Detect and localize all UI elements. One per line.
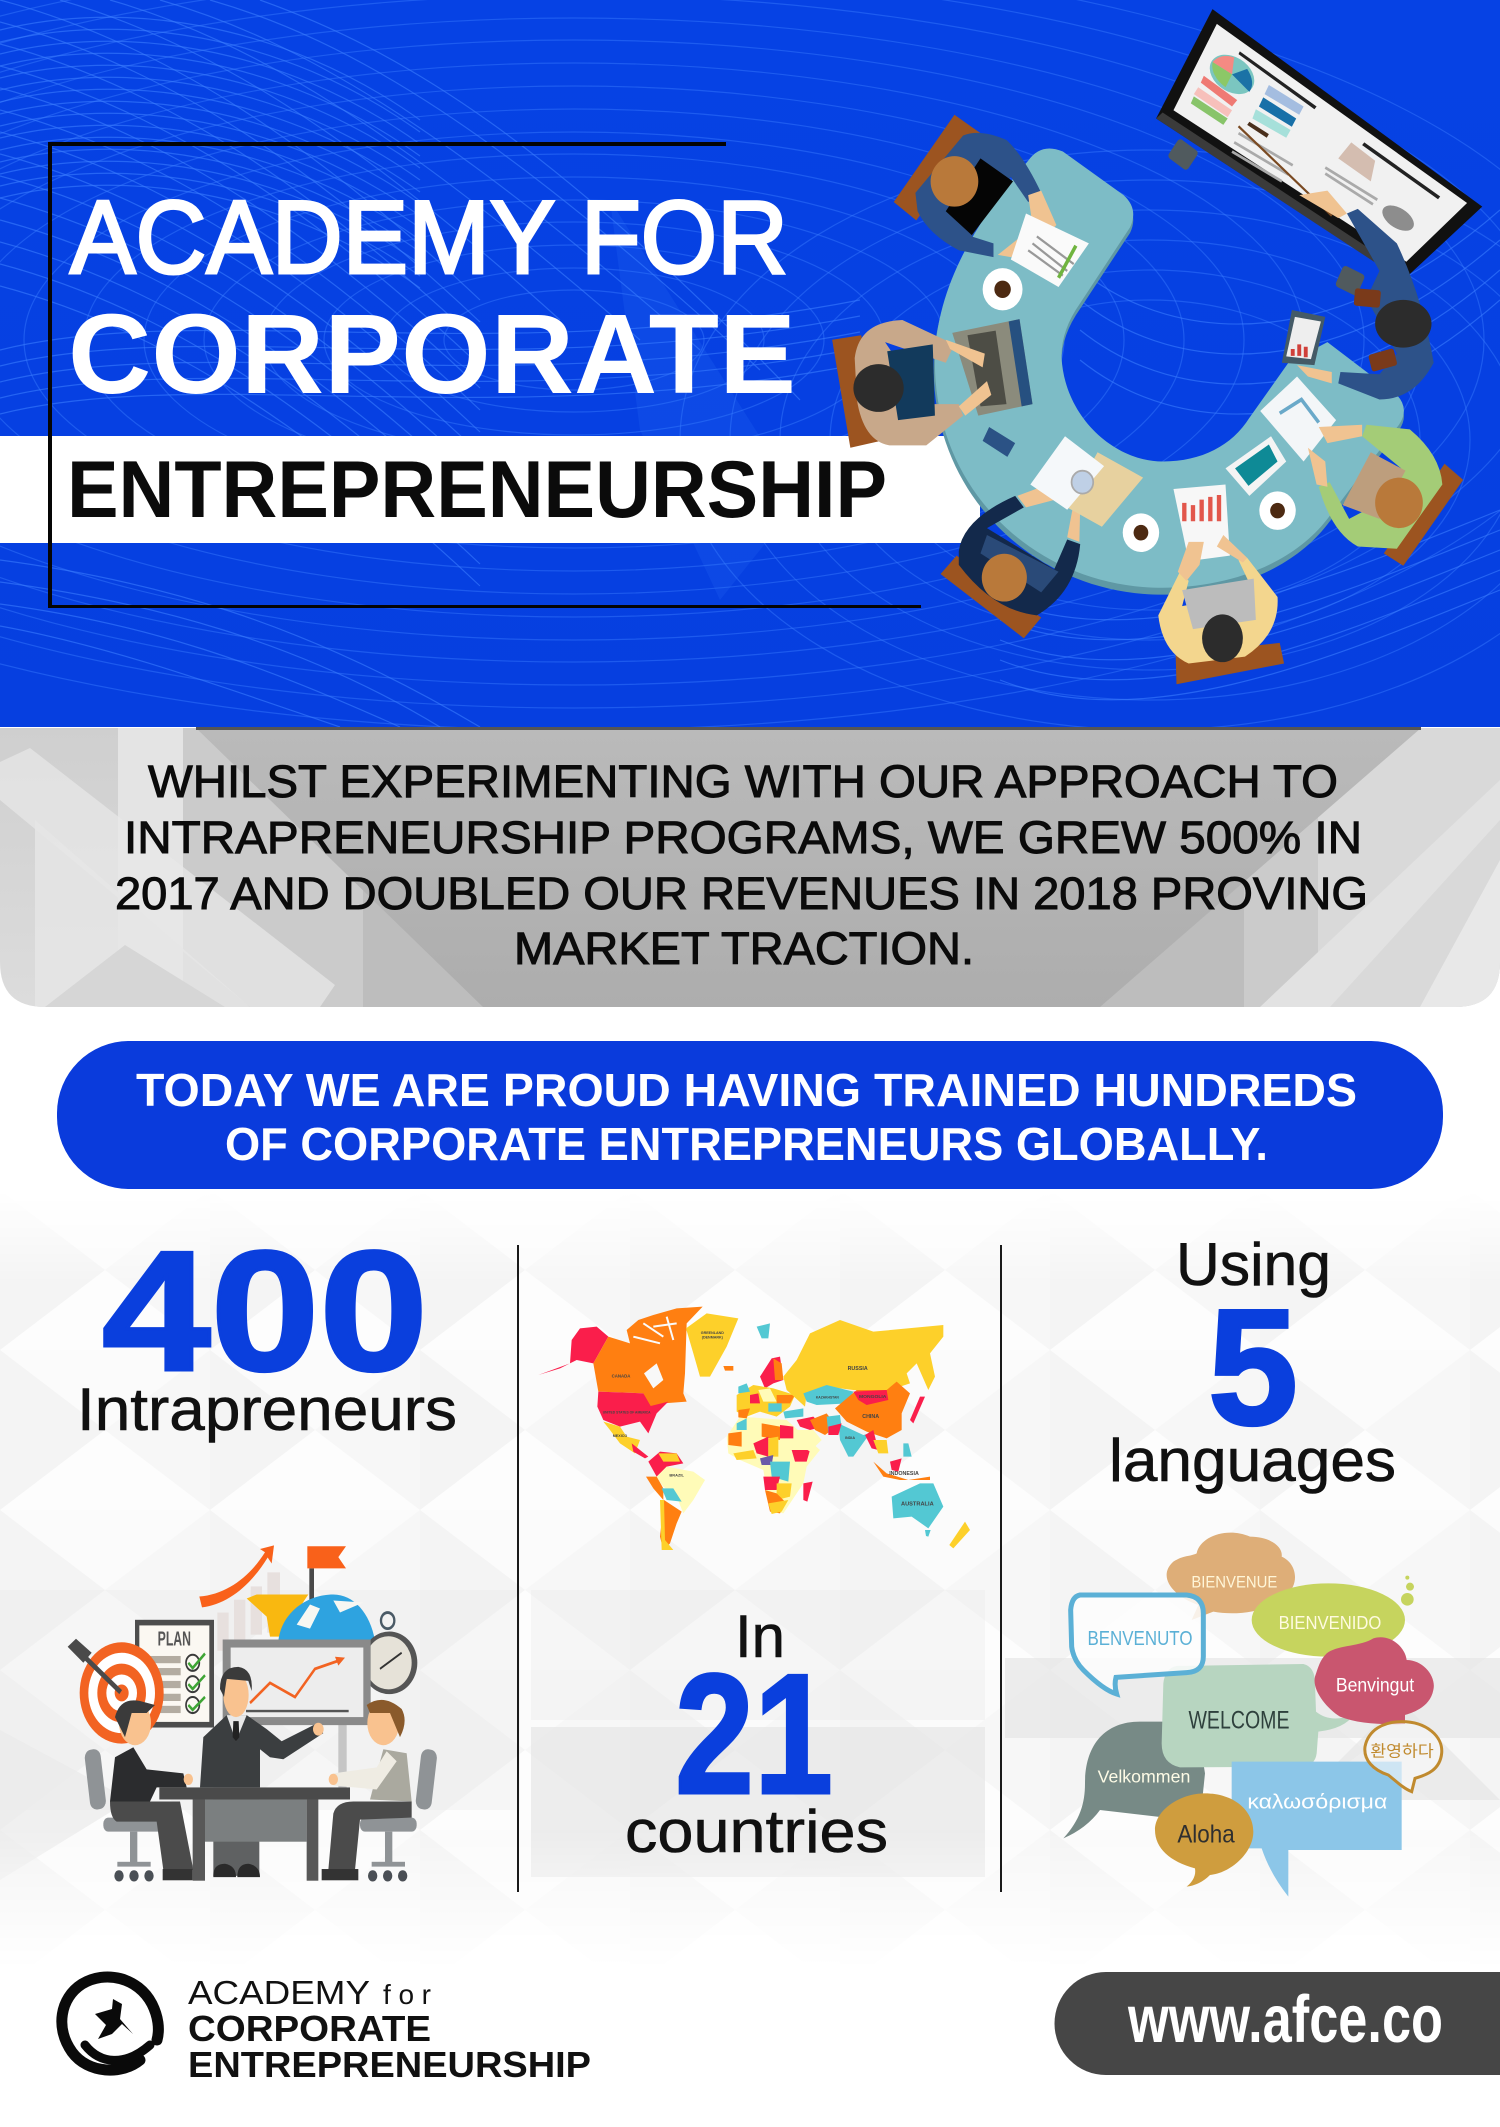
- logo wordmark: ACADEMY: [188, 1974, 370, 2011]
- north america: [538, 1307, 703, 1458]
- bubble: benvingut: Benvingut: [1336, 1675, 1415, 1696]
- flag: [307, 1546, 346, 1603]
- white title band: [0, 436, 980, 543]
- screen: [1156, 9, 1482, 296]
- number: 21: [675, 1639, 833, 1830]
- map labels: INDONESIA: [889, 1471, 919, 1477]
- logo wordmark: [188, 1974, 591, 2085]
- right seated man: [322, 1700, 438, 1881]
- map labels: INDIA: [845, 1436, 855, 1440]
- statement text: 2017 AND DOUBLED OUR REVENUES IN 2018 PROVING: [115, 868, 1368, 919]
- statement text: [115, 756, 1368, 974]
- bubble: korean: [1365, 1722, 1442, 1792]
- map labels: BRAZIL: [669, 1472, 685, 1477]
- person: bottom left: [941, 482, 1080, 638]
- cup: [983, 268, 1023, 310]
- stat: 5 languages: [1109, 1231, 1396, 1494]
- logo wordmark: for: [383, 1979, 431, 2010]
- svalbard and iceland: [757, 1323, 770, 1338]
- growth arrow: [199, 1545, 274, 1607]
- title: [67, 180, 887, 535]
- number: 400: [102, 1216, 428, 1407]
- phone: [983, 427, 1015, 457]
- speech bubbles: [1063, 1533, 1442, 1897]
- map labels: GREENLAND: [701, 1331, 724, 1335]
- bubble: velkommen: [1063, 1722, 1205, 1838]
- greenland: [686, 1313, 738, 1377]
- bars: [217, 1572, 280, 1651]
- illustration: meeting around table: [832, 9, 1482, 684]
- person: bottom: [1158, 535, 1284, 684]
- intro: Using: [1176, 1231, 1331, 1298]
- asia: [783, 1320, 943, 1480]
- funnel: [247, 1594, 308, 1637]
- presenter: [200, 1667, 324, 1877]
- map labels: MONGOLIA: [859, 1394, 887, 1400]
- stopwatch: [361, 1613, 417, 1694]
- left seated man: [84, 1700, 193, 1881]
- australia: [892, 1483, 970, 1548]
- map labels: KAZAKHSTAN: [816, 1396, 839, 1400]
- map labels: AUSTRALIA: [901, 1501, 934, 1507]
- bubble: benvenuto: [1071, 1595, 1203, 1694]
- statement text: INTRAPRENEURSHIP PROGRAMS, WE GREW 500% IN: [124, 812, 1362, 863]
- plan board: [135, 1620, 214, 1728]
- panel top edge: [196, 727, 1421, 730]
- callout text: [136, 1064, 1357, 1170]
- title line: academy for: ACADEMY FOR: [70, 180, 788, 296]
- bubble: greek: καλωσόρισμα: [1247, 1791, 1387, 1813]
- map labels: CANADA: [612, 1373, 631, 1378]
- bubble: aloha: [1155, 1793, 1253, 1887]
- bubble: bienvenue: [1167, 1533, 1295, 1620]
- faint triangle background for stats: [0, 1262, 1500, 1880]
- callout text: OF CORPORATE ENTREPRENEURS GLOBALLY.: [225, 1118, 1268, 1170]
- map labels: MEXICO: [613, 1434, 627, 1438]
- map labels: CHINA: [862, 1414, 879, 1420]
- grey statement panel: [0, 727, 1500, 1007]
- dividers: [517, 1245, 1002, 1892]
- bubble: bienvenido: BIENVENIDO: [1279, 1612, 1381, 1633]
- person: standing presenter: [1297, 191, 1434, 400]
- bubble: bienvenue: BIENVENUE: [1191, 1573, 1277, 1592]
- europe: [723, 1357, 795, 1418]
- world map: [538, 1307, 970, 1550]
- label: countries: [625, 1798, 888, 1865]
- plan board: PLAN: [158, 1627, 191, 1650]
- logo wordmark: CORPORATE: [188, 2008, 431, 2049]
- bubble: velkommen: Velkommen: [1098, 1767, 1190, 1787]
- map labels: UNITED STATES OF AMERICA: [603, 1411, 651, 1415]
- bubble: bienvenido: [1252, 1576, 1414, 1657]
- whiteboard: [223, 1639, 371, 1789]
- map labels: RUSSIA: [848, 1366, 868, 1372]
- africa: [727, 1417, 820, 1514]
- bubble: korean: 환영하다: [1370, 1743, 1434, 1761]
- stat: 400 intrapreneurs: [77, 1216, 457, 1443]
- globe: [278, 1594, 375, 1641]
- bubble: aloha: Aloha: [1177, 1822, 1235, 1849]
- map labels: [603, 1331, 934, 1507]
- map labels: (DENMARK): [702, 1336, 724, 1340]
- title line: entrepreneurship: ENTREPRENEURSHIP: [67, 445, 887, 535]
- website pill: [1054, 1972, 1500, 2075]
- label: Intrapreneurs: [77, 1376, 457, 1443]
- person: right: [1308, 425, 1463, 566]
- logo wordmark: ENTREPRENEURSHIP: [188, 2044, 591, 2085]
- bubble: welcome: [1162, 1664, 1353, 1767]
- callout text: TODAY WE ARE PROUD HAVING TRAINED HUNDREDS: [136, 1064, 1357, 1116]
- header background: [0, 0, 1500, 730]
- table: [934, 154, 1404, 595]
- bubble: welcome: WELCOME: [1188, 1707, 1289, 1734]
- intro: In: [735, 1603, 785, 1670]
- documents on table: [1030, 310, 1336, 561]
- statement text: MARKET TRACTION.: [514, 923, 974, 974]
- south america: [646, 1452, 705, 1550]
- title frame: [48, 142, 921, 608]
- person: left: [832, 319, 1033, 448]
- bubble: greek: [1232, 1762, 1402, 1897]
- blue callout pill: [57, 1041, 1443, 1189]
- logo mark: brush circle and surfer: [62, 1977, 158, 2070]
- bubble: benvenuto: BENVENUTO: [1087, 1628, 1192, 1650]
- stat: 21 countries: [625, 1603, 888, 1865]
- number: 5: [1208, 1275, 1298, 1459]
- icon: meeting presentation: [68, 1545, 438, 1881]
- logo: [62, 1974, 591, 2085]
- statement text: WHILST EXPERIMENTING WITH OUR APPROACH TO: [148, 756, 1338, 807]
- bubble: benvingut: [1315, 1637, 1434, 1724]
- title line: corporate: CORPORATE: [68, 291, 796, 417]
- target: [68, 1639, 164, 1744]
- desk: [159, 1787, 350, 1881]
- person: top left: [894, 115, 1089, 287]
- label: languages: [1109, 1427, 1396, 1494]
